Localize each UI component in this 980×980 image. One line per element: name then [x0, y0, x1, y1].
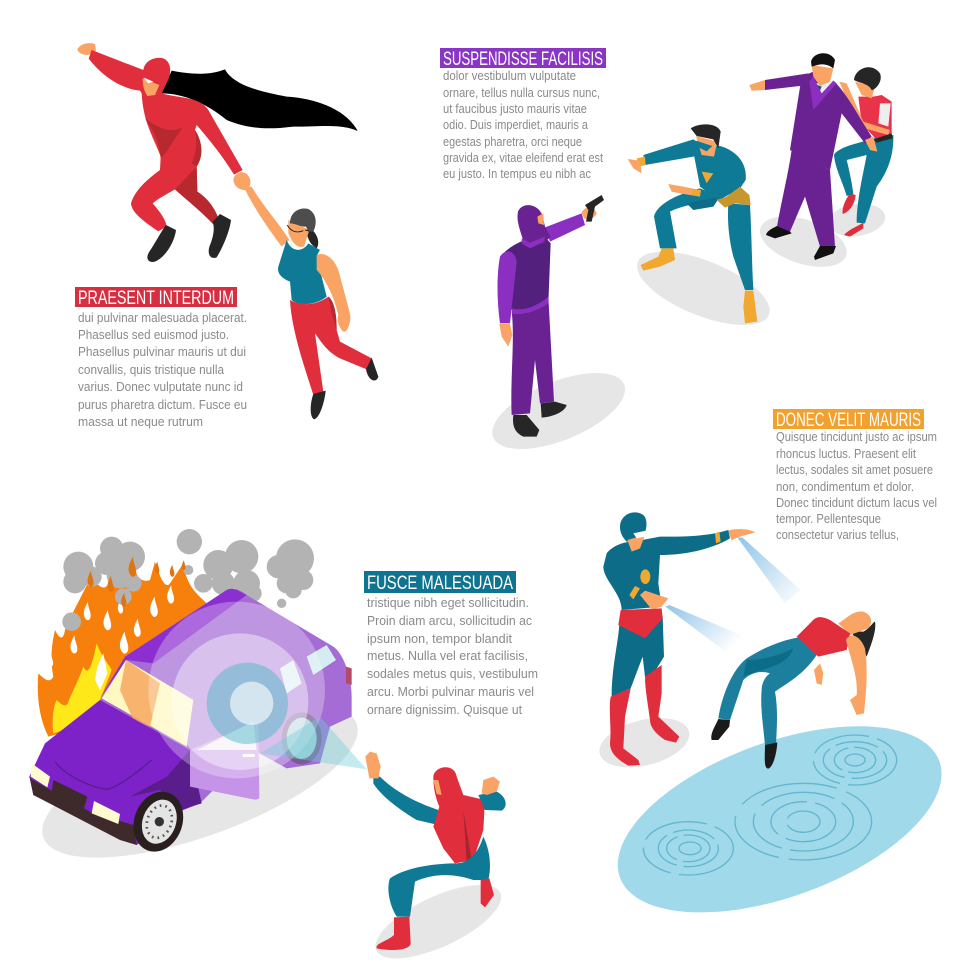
scene: gunman, hero and protected couple [482, 53, 893, 465]
hero in red suit [77, 43, 243, 262]
text block: Donec Velit Mauris [776, 429, 937, 542]
black cape [162, 69, 358, 131]
text block: Fusce Malesuada: ornare dignissim. Quisque ut [367, 702, 522, 717]
hero seen from behind [365, 752, 506, 950]
text block: Fusce Malesuada: Proin diam arcu, sollicitudin ac [367, 613, 532, 628]
water ripples [643, 735, 897, 875]
text block: Suspendisse Facilisis [443, 68, 603, 181]
text block: Fusce Malesuada: ipsum non, tempor blandit [367, 631, 512, 646]
text block: Praesent Interdum: Phasellus sed euismod justo. [78, 327, 229, 342]
levitating woman [711, 611, 875, 769]
text block: Praesent Interdum: massa ut neque rutrum [78, 414, 203, 429]
text block: Fusce Malesuada: tristique nibh eget sollicitudin. [367, 595, 529, 610]
text block: Fusce Malesuada: arcu. Morbi pulvinar mauris vel [367, 684, 534, 699]
smoke clouds [62, 529, 314, 631]
scene: burning car and hero with freeze beam [25, 529, 511, 973]
flames behind car [38, 557, 207, 737]
hero in teal suit [628, 124, 757, 323]
text block: Donec Velit Mauris: Quisque tincidunt justo ac ipsum [776, 429, 937, 444]
text block: Donec Velit Mauris: lectus, sodales sit amet posuere [776, 462, 933, 477]
text block: Suspendisse Facilisis: egestas pharetra, orci neque [443, 134, 582, 149]
text block: Donec Velit Mauris: consectetur varius tellus, [776, 527, 899, 542]
text block: Praesent Interdum: Phasellus pulvinar mauris ut dui [78, 344, 246, 359]
scene: hero levitating woman over water [593, 512, 966, 950]
heading: Fusce Malesuada: FUSCE MALESUADA [367, 573, 513, 594]
heading: Suspendisse Facilisis [440, 48, 606, 70]
text block: Suspendisse Facilisis: ornare, tellus nulla cursus nunc, [443, 85, 600, 100]
text block: Suspendisse Facilisis: eu justo. In tempus eu nibh ac [443, 166, 591, 181]
text block: Fusce Malesuada [367, 595, 538, 717]
orange flame tips over smoke [88, 557, 186, 607]
hero in teal and red suit [603, 512, 755, 766]
text block: Fusce Malesuada: sodales metus quis, vestibulum [367, 666, 538, 681]
heading: Donec Velit Mauris [773, 409, 924, 431]
text block: Donec Velit Mauris: non, condimentum et dolor. [776, 479, 914, 494]
hero ground shadow [366, 870, 511, 973]
heading: Donec Velit Mauris: DONEC VELIT MAURIS [776, 410, 921, 431]
text block: Suspendisse Facilisis: odio. Duis imperdiet, mauris a [443, 117, 589, 132]
masked gunman [497, 195, 604, 437]
light beams [665, 537, 801, 655]
hero ground shadow [594, 710, 694, 776]
text block: Suspendisse Facilisis: dolor vestibulum vulputate [443, 68, 576, 83]
text block: Donec Velit Mauris: Donec tincidunt dictum lacus vel [776, 495, 937, 510]
text block: Praesent Interdum: dui pulvinar malesuada placerat. [78, 310, 247, 325]
text block: Donec Velit Mauris: rhoncus luctus. Praesent elit [776, 446, 916, 461]
text block: Fusce Malesuada: metus. Nulla vel erat facilisis, [367, 648, 528, 663]
freeze bubble over car [148, 602, 325, 778]
woman being carried [233, 172, 378, 419]
freeze beam [260, 717, 367, 769]
scene: flying hero rescuing woman [77, 43, 378, 419]
woman behind suited man [834, 67, 893, 237]
purple car [29, 589, 352, 859]
text block: Suspendisse Facilisis: gravida ex, vitae eleifend erat est [443, 150, 603, 165]
heading: Suspendisse Facilisis: SUSPENDISSE FACILISIS [443, 49, 603, 70]
heading: Praesent Interdum: PRAESENT INTERDUM [78, 288, 234, 309]
man in purple suit [749, 53, 877, 260]
text block: Donec Velit Mauris: tempor. Pellentesque [776, 511, 881, 526]
ground shadows [482, 200, 887, 465]
text block: Praesent Interdum: purus pharetra dictum. Fusce eu [78, 397, 247, 412]
open car door [190, 720, 259, 800]
text block: Praesent Interdum: convallis, quis tristique nulla [78, 362, 225, 377]
text block: Praesent Interdum: varius. Donec vulputate nunc id [78, 379, 243, 394]
text block: Suspendisse Facilisis: ut faucibus justo mauris vitae [443, 101, 587, 116]
text block: Praesent Interdum [78, 310, 247, 429]
car ground shadow [25, 672, 375, 889]
water puddle [593, 689, 966, 950]
